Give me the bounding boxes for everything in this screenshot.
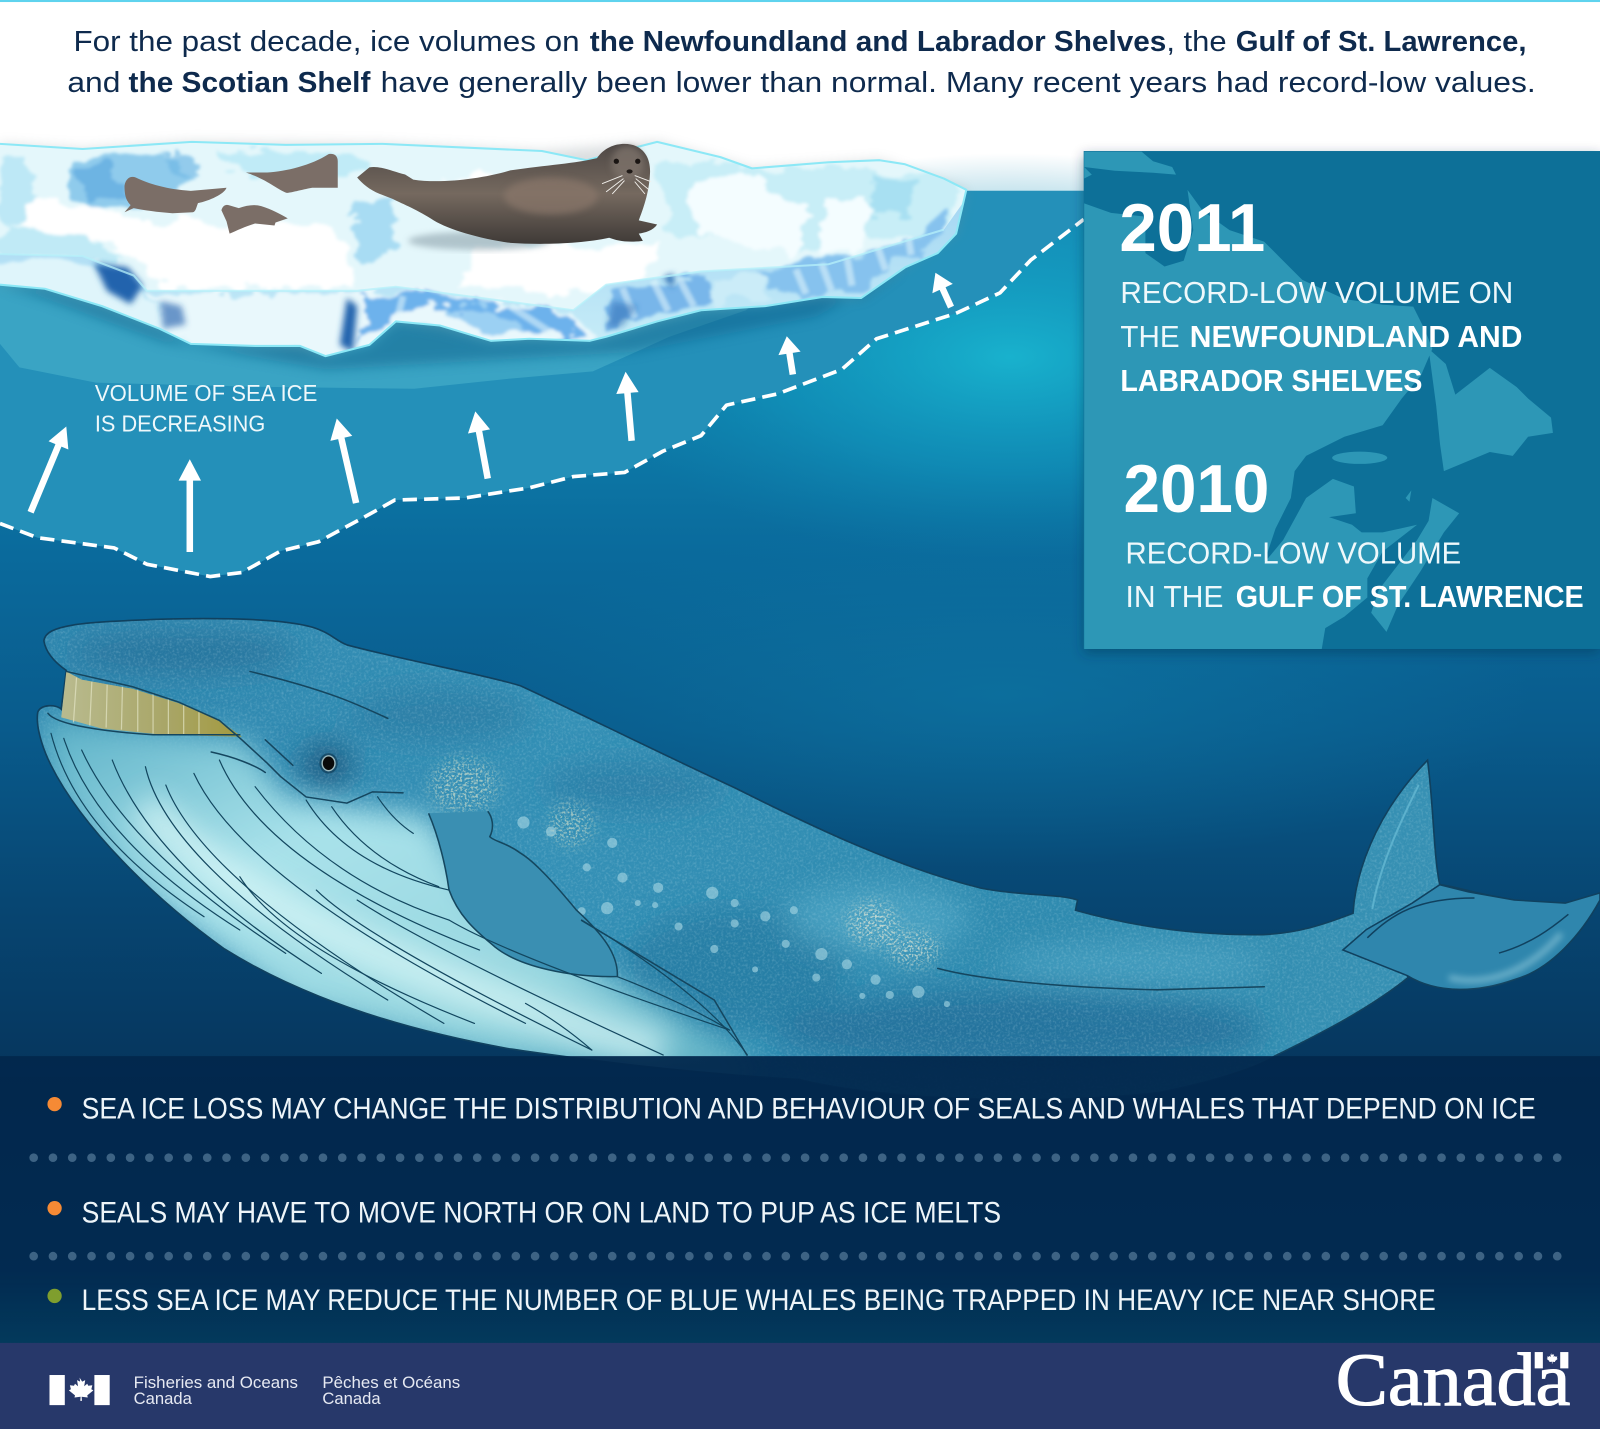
heading paragraph: and [67, 67, 120, 99]
whale mottled patches [430, 757, 940, 967]
tail fluke [1343, 885, 1600, 989]
ice streaks [398, 237, 911, 333]
former ice volume region above dashed line [0, 191, 1084, 577]
ice floe [0, 138, 969, 369]
2010 stat: RECORD-LOW VOLUME [1126, 536, 1461, 570]
ice dark blue cracks [94, 263, 673, 352]
arrow 5 [614, 371, 643, 442]
heading paragraph: , the [1166, 26, 1227, 58]
baleen [61, 671, 242, 737]
label: volume of sea ice is decreasing [95, 380, 317, 437]
2011 stat: NEWFOUNDLAND AND [1190, 320, 1522, 354]
bullet 2: seals may move: SEALS MAY HAVE TO MOVE NORTH OR ON LAND TO PUP AS ICE MELTS [82, 1196, 1001, 1229]
bullet 3: fewer trapped whales: LESS SEA ICE MAY REDUCE THE NUMBER OF BLUE WHALES BEING TRAPPED IN HEAVY ICE NEAR SHORE [82, 1284, 1436, 1317]
Canada wordmark: Canada [1336, 1339, 1570, 1422]
department name French: Canada [322, 1389, 381, 1408]
2011 stat [1119, 191, 1522, 398]
seal silhouette 2 [246, 154, 338, 193]
arrow 3 [326, 416, 367, 506]
whale eye [319, 753, 338, 773]
footer band [0, 1339, 1600, 1429]
whale texture [38, 620, 1438, 1056]
heading paragraph: the Scotian Shelf [129, 67, 371, 99]
whale outline [37, 619, 1600, 1100]
ice edge highlights [0, 230, 944, 310]
heading paragraph: For the past decade, ice volumes on [73, 26, 580, 58]
ice surface patches [0, 153, 959, 296]
panel: impacts list [0, 1056, 1600, 1343]
panel: record-low years [1084, 151, 1600, 651]
heading paragraph: Gulf of St. Lawrence, [1236, 26, 1527, 58]
label: volume of sea ice is decreasing: VOLUME OF SEA ICE [95, 380, 317, 406]
jaw and head lines [48, 671, 1418, 1055]
icon: Canadian flag symbol [49, 1375, 110, 1405]
seal silhouette 3 [221, 205, 288, 234]
heading paragraph: have generally been lower than normal. Many recent years had record-low values. [381, 67, 1536, 99]
department name French [322, 1373, 460, 1408]
arrow 6 [776, 334, 804, 376]
heading paragraph [67, 26, 1536, 99]
arrow 4 [464, 409, 499, 481]
department name English: Fisheries and Oceans [134, 1373, 298, 1392]
2011 stat: LABRADOR SHELVES [1120, 364, 1422, 398]
2010 stat: GULF OF ST. LAWRENCE [1236, 580, 1584, 614]
label: volume of sea ice is decreasing: IS DECREASING [95, 411, 265, 437]
whale belly [38, 714, 755, 1092]
department name French: Pêches et Océans [322, 1373, 460, 1392]
flipper [429, 811, 617, 977]
department name English [134, 1373, 298, 1408]
arrow 1 [21, 422, 76, 516]
main seal [357, 144, 657, 250]
whale flank speckles [517, 816, 950, 1007]
2010 stat: 2010 [1123, 452, 1269, 527]
whale back shading [71, 633, 1265, 1071]
department name English: Canada [134, 1389, 192, 1408]
dashed line: ice volume boundary [0, 219, 1084, 577]
2011 stat: RECORD-LOW VOLUME ON [1120, 276, 1513, 310]
arrow 2 [179, 459, 201, 552]
2011 stat: THE [1120, 320, 1180, 354]
blue whale illustration [36, 618, 1600, 1060]
2011 stat: 2011 [1119, 191, 1265, 266]
heading paragraph: the Newfoundland and Labrador Shelves [590, 26, 1166, 58]
arrow 7 [925, 268, 961, 312]
map of Atlantic Canada [1084, 152, 1553, 651]
ventral grooves [51, 733, 747, 1055]
ice side faces [0, 204, 962, 338]
seal silhouette 1 [124, 177, 227, 213]
2010 stat: IN THE [1126, 580, 1223, 614]
2010 stat [1123, 452, 1584, 614]
current ice ghost shadow [0, 276, 776, 389]
